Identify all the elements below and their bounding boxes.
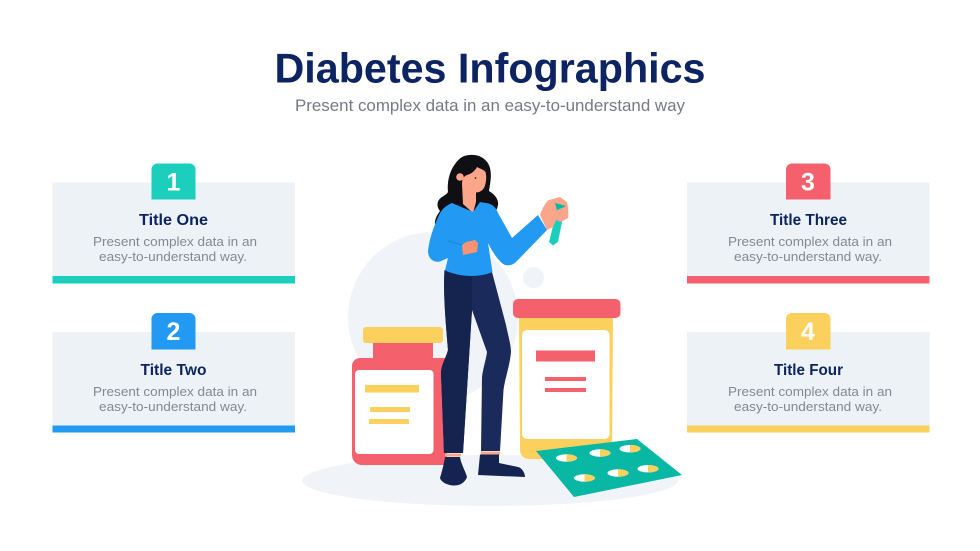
background circle bbox=[348, 232, 518, 402]
badge: number 1 bbox=[152, 164, 196, 200]
ankles bbox=[445, 452, 500, 456]
badge: number 2: 2 bbox=[167, 318, 180, 346]
badge: number 2 bbox=[152, 313, 196, 350]
eye bbox=[475, 177, 476, 179]
icon: right medicine bottle bbox=[513, 299, 620, 459]
text block: card 2 description bbox=[93, 385, 257, 414]
text block: card 4 description bbox=[728, 385, 892, 414]
text block: card 1 description bbox=[93, 235, 257, 264]
illustration: woman with medicine bbox=[302, 155, 682, 506]
heading: title four: Title Four bbox=[774, 362, 843, 379]
icon: blister pack of pills bbox=[536, 439, 682, 497]
panel: card 2 bbox=[52, 313, 295, 432]
icon: woman figure bbox=[428, 155, 568, 486]
hair bbox=[435, 155, 498, 227]
left leg shade bbox=[441, 270, 472, 453]
icon: left medicine bottle bbox=[352, 327, 447, 465]
text block: card 4 description: easy-to-understand way. bbox=[734, 400, 882, 414]
badge: number 3: 3 bbox=[801, 168, 815, 196]
pants bbox=[441, 270, 511, 453]
text block: card 2 description: easy-to-understand way. bbox=[99, 400, 247, 414]
shoes bbox=[440, 454, 525, 486]
text block: card 3 description: easy-to-understand way. bbox=[734, 250, 882, 264]
shirt bbox=[428, 202, 547, 276]
sleeve crease bbox=[448, 241, 462, 245]
neck and face bbox=[462, 167, 486, 213]
text block: card 2 description: Present complex data in an bbox=[93, 385, 257, 399]
text block: card 3 description bbox=[728, 235, 892, 264]
text block: card 1 description: Present complex data in an bbox=[93, 235, 257, 249]
text block: card 1 description: easy-to-understand way. bbox=[99, 250, 247, 264]
title: Diabetes Infographics bbox=[274, 44, 706, 92]
panel: card 4 bbox=[687, 313, 930, 432]
panel: card 3 bbox=[687, 164, 930, 284]
badge: number 4: 4 bbox=[801, 318, 815, 346]
subtitle: Present complex data in an easy-to-understand way bbox=[295, 97, 686, 115]
badge: number 1: 1 bbox=[167, 168, 181, 196]
test tube bbox=[549, 203, 566, 246]
text block: card 4 description: Present complex data in an bbox=[728, 385, 892, 399]
badge: number 4 bbox=[786, 313, 830, 350]
ear bbox=[456, 173, 464, 181]
heading: title three: Title Three bbox=[770, 212, 847, 229]
badge: number 3 bbox=[786, 164, 830, 200]
small background circle bbox=[523, 267, 544, 288]
test tube cap bbox=[555, 203, 566, 210]
fist bbox=[462, 240, 478, 255]
heading: title two: Title Two bbox=[140, 362, 207, 379]
raised hand bbox=[540, 197, 568, 230]
heading: title one: Title One bbox=[139, 212, 208, 229]
ground shadow bbox=[302, 455, 678, 506]
text block: card 3 description: Present complex data in an bbox=[728, 235, 892, 249]
panel: card 1 bbox=[52, 164, 295, 284]
